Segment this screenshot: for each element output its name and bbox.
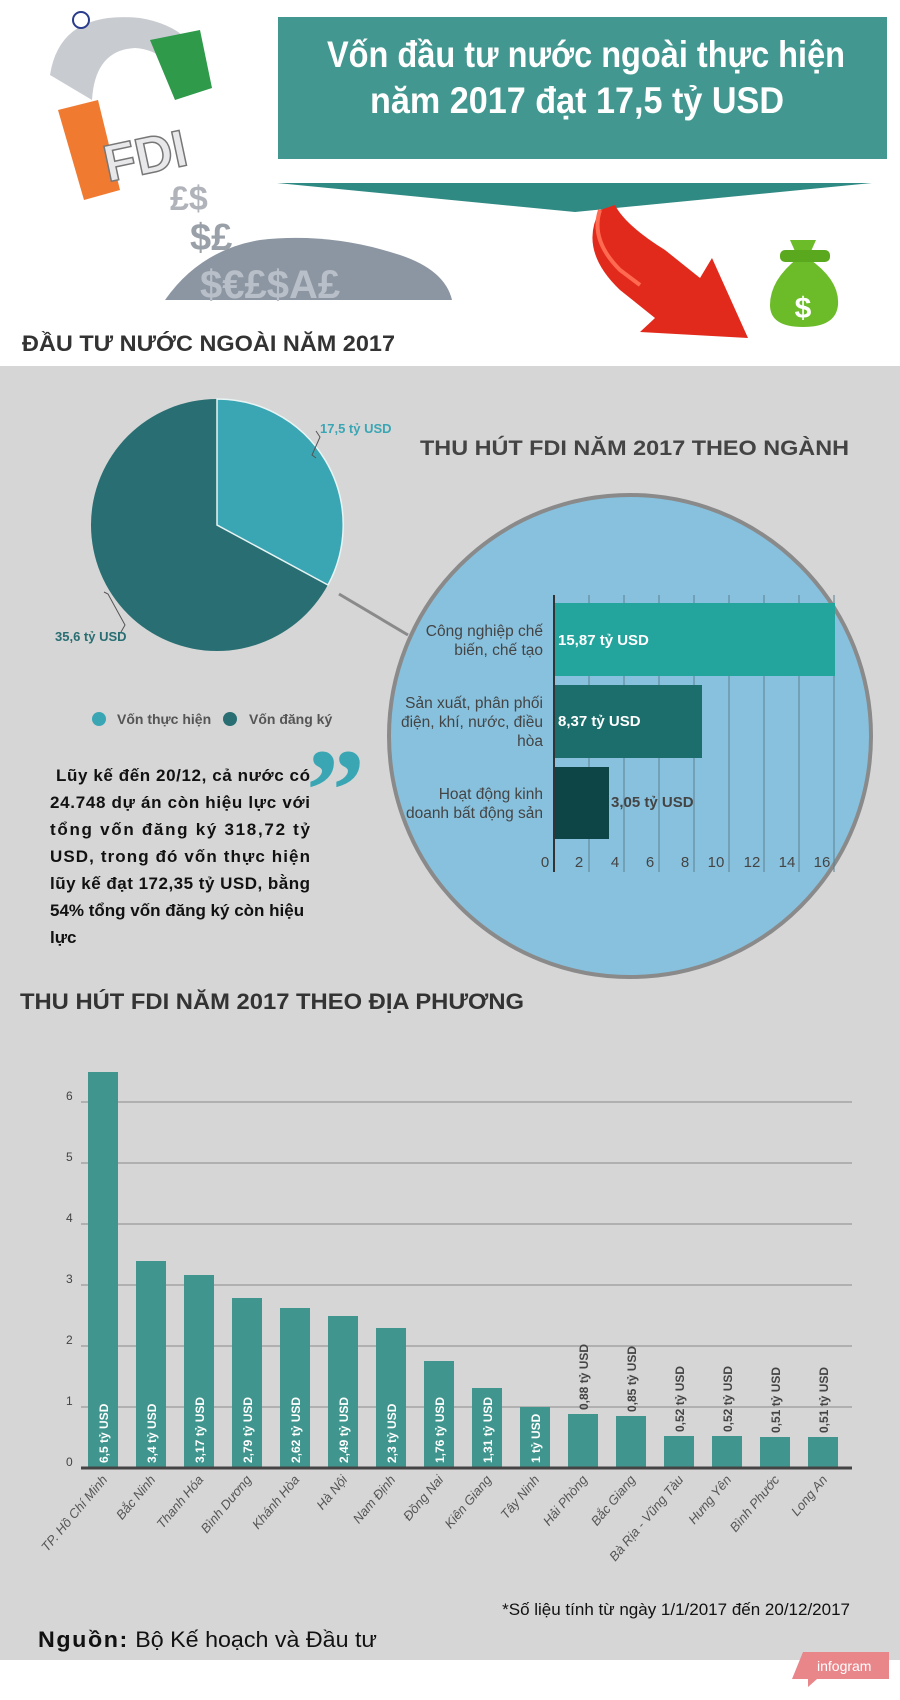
bar: utilities (555, 685, 702, 758)
text block: cumulative summary: Lũy kế đến 20/12, cả nước có (56, 766, 310, 785)
sector category labels: doanh bất động sản (406, 805, 543, 822)
gray background panel (0, 366, 900, 1660)
province bar chart: 6 (66, 1089, 73, 1103)
bar: real estate: 3,05 tỷ USD (611, 794, 694, 811)
illustration: FDI magnet with currency (50, 12, 452, 307)
province axis labels: TP. Hồ Chí Minh (38, 1472, 110, 1554)
infogram tag (792, 1652, 889, 1687)
text block: cumulative summary: lũy kế đạt 172,35 tỷ USD, bằng (50, 874, 310, 893)
province bar chart: 0,51 tỷ USD (817, 1367, 831, 1433)
bar value labels: 1,76 tỷ USD (433, 1397, 447, 1463)
sector category labels: hòa (517, 733, 543, 750)
icon: green money bag: $ (795, 292, 812, 325)
bar: real estate (555, 767, 694, 839)
x axis ticks: 6 (646, 854, 654, 871)
province axis labels: Kiên Giang (441, 1472, 495, 1531)
illustration: FDI magnet with currency: $£ (190, 217, 232, 259)
bar: manufacturing: 15,87 tỷ USD (558, 632, 649, 649)
heading: FDI by province: THU HÚT FDI NĂM 2017 THEO ĐỊA PHƯƠNG (20, 989, 524, 1014)
pie label: realized: 17,5 tỷ USD (320, 421, 392, 436)
text block: cumulative summary: lực (50, 928, 76, 947)
x axis ticks: 14 (779, 854, 795, 871)
sector category labels: Công nghiệp chế (426, 623, 543, 640)
text block: cumulative summary: 54% tổng vốn đăng ký còn hiệu (50, 901, 304, 920)
bar value labels (97, 1397, 543, 1463)
province bar chart: 0,85 tỷ USD (625, 1346, 639, 1412)
bar value labels: 2,3 tỷ USD (385, 1403, 399, 1463)
pie label: realized (312, 421, 392, 458)
illustration: FDI magnet with currency: £$ (170, 180, 208, 218)
pie legend: Vốn đăng ký (249, 711, 332, 727)
province axis labels: Thanh Hóa (153, 1472, 206, 1531)
province bar chart: 5 (66, 1150, 73, 1164)
illustration: FDI magnet with currency: FDI (98, 120, 192, 194)
connector line from pie to circle (339, 594, 408, 635)
illustration: FDI magnet with currency: $€£$A£ (200, 263, 340, 307)
x axis ticks: 2 (575, 854, 583, 871)
bar value labels: 2,49 tỷ USD (337, 1397, 351, 1463)
province bar chart: 0,52 tỷ USD (721, 1366, 735, 1432)
province axis labels: Bình Dương (198, 1472, 255, 1536)
bar value labels: 3,4 tỷ USD (145, 1403, 159, 1463)
bar: utilities: 8,37 tỷ USD (558, 713, 641, 730)
province bar chart: 0,52 tỷ USD (673, 1366, 687, 1432)
province axis labels: Bắc Giang (588, 1472, 639, 1528)
icon: red curved arrow (592, 205, 748, 338)
pie label: registered (55, 592, 127, 644)
province axis labels: Đồng Nai (400, 1471, 447, 1523)
province axis labels: Nam Định (350, 1472, 398, 1526)
x axis ticks: 10 (708, 854, 724, 871)
bar: manufacturing (555, 603, 835, 676)
sector category labels (401, 623, 543, 822)
province bar chart: 3 (66, 1272, 73, 1286)
heading: FDI by sector: THU HÚT FDI NĂM 2017 THEO NGÀNH (420, 436, 849, 460)
province axis labels: Hải Phòng (540, 1472, 591, 1528)
province bar chart: 0 (66, 1455, 73, 1469)
province bar chart: 0,51 tỷ USD (769, 1367, 783, 1433)
title banner: năm 2017 đạt 17,5 tỷ USD (370, 80, 784, 121)
text block: cumulative summary: USD, trong đó vốn thực hiện (50, 847, 310, 866)
x axis ticks: 8 (681, 854, 689, 871)
bar value labels: 2,79 tỷ USD (241, 1397, 255, 1463)
province bar chart: 1 (66, 1394, 73, 1408)
bar value labels: 6,5 tỷ USD (97, 1403, 111, 1463)
bar value labels: 1 tỷ USD (529, 1413, 543, 1463)
text block: cumulative summary (50, 766, 311, 947)
province axis labels: Bình Phước (727, 1472, 783, 1535)
banner pointer triangle (277, 183, 872, 212)
province bar chart: 2 (66, 1333, 73, 1347)
province axis labels: Bà Rịa - Vũng Tàu (606, 1472, 686, 1564)
province axis labels: Khánh Hòa (249, 1472, 302, 1532)
title banner: Vốn đầu tư nước ngoài thực hiện (327, 34, 845, 75)
province bar chart (38, 1072, 852, 1564)
x axis ticks: 0 (541, 854, 549, 871)
x axis ticks: 4 (611, 854, 619, 871)
x axis ticks: 16 (814, 854, 830, 871)
bar value labels: 2,62 tỷ USD (289, 1397, 303, 1463)
x axis ticks (541, 854, 830, 871)
pie legend (92, 711, 332, 727)
icon: quote marks: ” (306, 725, 365, 856)
province axis labels: Hưng Yên (685, 1472, 734, 1527)
bar value labels: 3,17 tỷ USD (193, 1397, 207, 1463)
province axis labels: Tây Ninh (497, 1472, 542, 1522)
pie label: registered: 35,6 tỷ USD (55, 629, 127, 644)
province axis labels (38, 1471, 830, 1564)
circle panel: sector bar chart (389, 495, 871, 977)
source: Nguồn: Bộ Kế hoạch và Đầu tư (38, 1627, 377, 1652)
heading: foreign investment 2017: ĐẦU TƯ NƯỚC NGOÀI NĂM 2017 (22, 331, 395, 356)
text block: cumulative summary: tổng vốn đăng ký 318,72 tỷ (50, 820, 311, 839)
province axis labels: Long An (788, 1472, 830, 1519)
title banner (278, 17, 887, 159)
province bar chart: 0,88 tỷ USD (577, 1344, 591, 1410)
icon: green money bag (770, 240, 838, 327)
pie legend: Vốn thực hiện (117, 711, 211, 727)
pie chart (55, 399, 392, 651)
sector category labels: Sản xuất, phân phối (405, 695, 543, 712)
province axis labels: Hà Nội (313, 1471, 351, 1512)
footnote: *Số liệu tính từ ngày 1/1/2017 đến 20/12/2017 (502, 1600, 850, 1619)
x axis ticks: 12 (744, 854, 760, 871)
province bar chart: 4 (66, 1211, 73, 1225)
sector category labels: biến, chế tạo (454, 642, 543, 659)
text block: cumulative summary: 24.748 dự án còn hiệu lực với (50, 793, 310, 812)
sector category labels: điện, khí, nước, điều (401, 714, 543, 731)
sector category labels: Hoạt động kinh (439, 786, 543, 803)
infogram tag: infogram (817, 1658, 871, 1674)
bar value labels: 1,31 tỷ USD (481, 1397, 495, 1463)
province axis labels: Bắc Ninh (113, 1472, 158, 1522)
